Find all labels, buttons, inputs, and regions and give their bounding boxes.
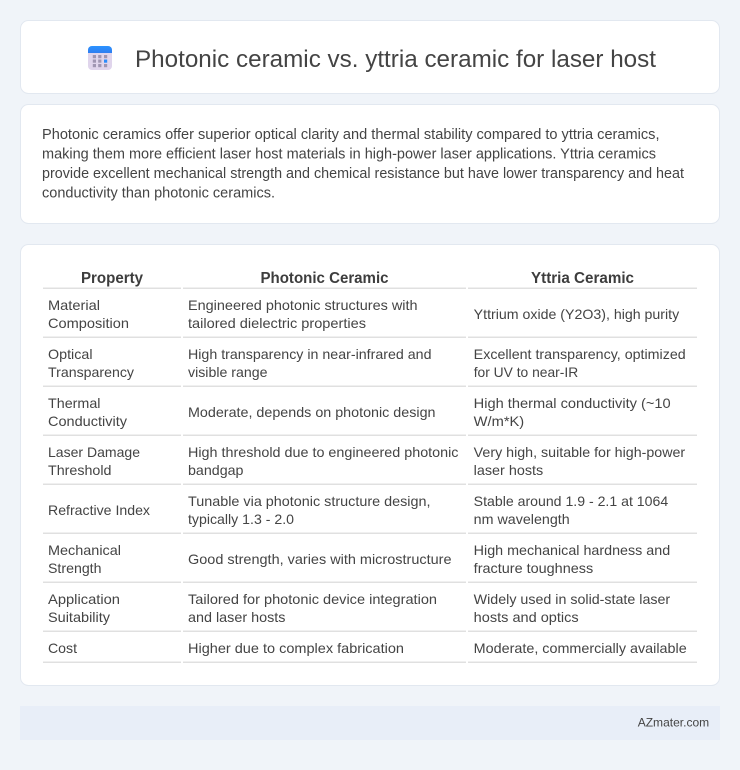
row: application suitability xyxy=(48,591,671,625)
row: thermal conductivity: Moderate, depends on photonic design xyxy=(188,404,436,420)
row: material composition: tailored dielectric properties xyxy=(188,315,366,331)
row: thermal conductivity: W/m*K) xyxy=(474,413,524,429)
row: material composition: Composition xyxy=(48,315,129,331)
row: optical transparency: visible range xyxy=(188,364,268,380)
table header row: Photonic Ceramic xyxy=(260,270,389,287)
footer bar xyxy=(20,706,720,740)
row: optical transparency: High transparency in near-infrared and xyxy=(188,346,432,362)
row: mechanical strength: High mechanical hardness and xyxy=(474,542,670,558)
icon: calendar grid xyxy=(88,46,112,70)
panel: comparison table xyxy=(20,244,720,686)
row: refractive index: Tunable via photonic structure design, xyxy=(188,493,430,509)
table header row: Property xyxy=(81,270,143,287)
row: refractive index xyxy=(48,493,668,527)
row: cost: Cost xyxy=(48,640,77,656)
row: laser damage threshold: laser hosts xyxy=(474,462,543,478)
table rules xyxy=(43,288,697,663)
row: refractive index: typically 1.3 - 2.0 xyxy=(188,511,294,527)
row: material composition: Engineered photonic structures with xyxy=(188,297,418,313)
row: mechanical strength xyxy=(48,542,670,576)
table header row xyxy=(81,270,634,287)
panel: description xyxy=(20,104,720,224)
row: thermal conductivity: Thermal xyxy=(48,395,100,411)
row: optical transparency: for UV to near-IR xyxy=(474,364,578,380)
row: laser damage threshold: bandgap xyxy=(188,462,244,478)
row: refractive index: nm wavelength xyxy=(474,511,570,527)
row: refractive index: Stable around 1.9 - 2.1 at 1064 xyxy=(474,493,668,509)
row: thermal conductivity: High thermal conductivity (~10 xyxy=(474,395,671,411)
row: thermal conductivity xyxy=(48,395,671,429)
table header row: Yttria Ceramic xyxy=(531,270,634,287)
row: optical transparency: Excellent transparency, optimized xyxy=(474,346,686,362)
row: cost: Higher due to complex fabrication xyxy=(188,640,404,656)
row: refractive index: Refractive Index xyxy=(48,502,150,518)
row: material composition xyxy=(48,297,679,331)
row: application suitability: Widely used in solid-state laser xyxy=(474,591,671,607)
panel: title card xyxy=(20,20,720,94)
row: application suitability: Application xyxy=(48,591,120,607)
description text: Photonic ceramics offer superior optical clarity and thermal stability compared to yttria ceramics, xyxy=(42,127,660,143)
row: cost: Moderate, commercially available xyxy=(474,640,687,656)
row: mechanical strength: Good strength, varies with microstructure xyxy=(188,551,452,567)
row: laser damage threshold: Very high, suitable for high-power xyxy=(474,444,686,460)
row: application suitability: and laser hosts xyxy=(188,609,286,625)
row: laser damage threshold: High threshold due to engineered photonic xyxy=(188,444,458,460)
row: optical transparency xyxy=(48,346,686,380)
description text xyxy=(42,127,684,202)
row: application suitability: hosts and optics xyxy=(474,609,579,625)
row: thermal conductivity: Conductivity xyxy=(48,413,127,429)
description text: conductivity than photonic ceramics. xyxy=(42,186,275,202)
title: Photonic ceramic vs. yttria ceramic for laser host xyxy=(135,46,656,73)
row: application suitability: Tailored for photonic device integration xyxy=(188,591,437,607)
row: optical transparency: Optical xyxy=(48,346,92,362)
footer bar: AZmater.com xyxy=(638,716,709,730)
description text: provide excellent mechanical strength and chemical resistance but have lower transparency and heat xyxy=(42,166,684,182)
row: mechanical strength: Strength xyxy=(48,560,102,576)
row: laser damage threshold: Laser Damage xyxy=(48,444,140,460)
row: mechanical strength: fracture toughness xyxy=(474,560,593,576)
row: mechanical strength: Mechanical xyxy=(48,542,121,558)
row: laser damage threshold xyxy=(48,444,686,478)
row: laser damage threshold: Threshold xyxy=(48,462,112,478)
description text: making them more efficient laser host materials in high-power laser applications. Yttria ceramics xyxy=(42,146,656,162)
row: material composition: Material xyxy=(48,297,100,313)
row: optical transparency: Transparency xyxy=(48,364,134,380)
row: application suitability: Suitability xyxy=(48,609,110,625)
row: cost xyxy=(48,640,687,656)
row: material composition: Yttrium oxide (Y2O3), high purity xyxy=(474,306,679,322)
